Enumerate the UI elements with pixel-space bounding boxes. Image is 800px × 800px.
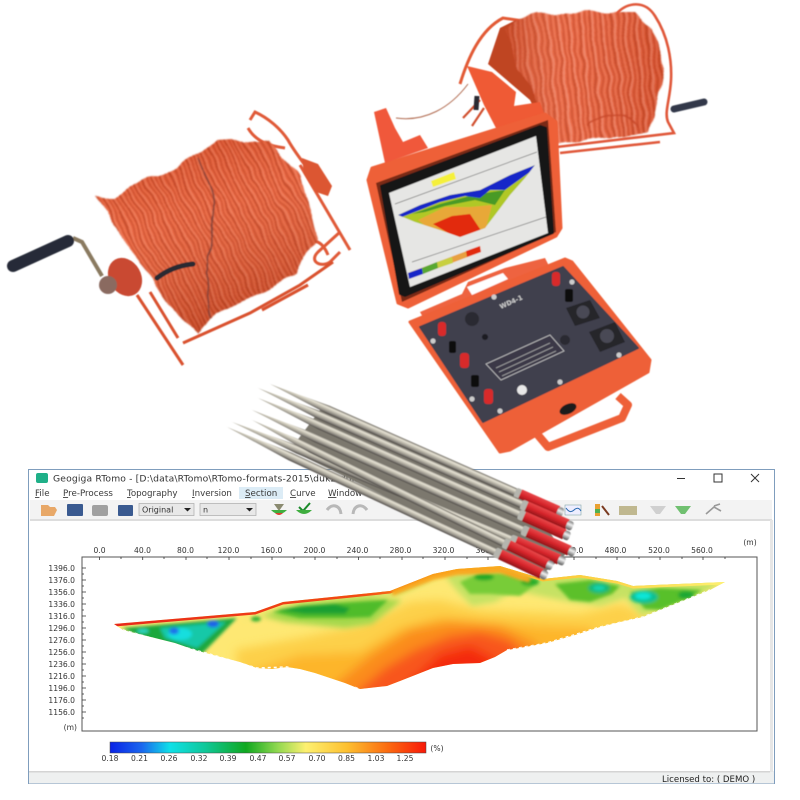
lower frame bars xyxy=(137,262,333,365)
distance labels: 40.0 xyxy=(134,546,151,555)
icon: open folder xyxy=(41,505,57,516)
combo: n xyxy=(200,504,256,516)
dark sense wire xyxy=(198,160,214,318)
tablet screen xyxy=(389,136,548,287)
colour scale: 0.21 xyxy=(131,754,148,763)
logo badge xyxy=(517,385,527,395)
combo: Original: Original xyxy=(142,506,173,514)
electrode stakes bundle xyxy=(225,379,577,581)
data logger device xyxy=(368,108,650,452)
colour scale: 0.57 xyxy=(279,754,296,763)
toolbar xyxy=(30,500,772,521)
crank handle xyxy=(13,241,68,266)
cable reel: front left xyxy=(13,112,350,365)
status bar xyxy=(29,520,774,785)
screen colour bar xyxy=(408,246,481,279)
menu bar: File xyxy=(35,489,50,499)
distance labels: 520.0 xyxy=(648,546,670,555)
icon: tools xyxy=(706,504,721,514)
case lid xyxy=(368,114,561,307)
elevation labels: (m) xyxy=(64,723,77,732)
menu bar: Topography xyxy=(126,489,178,499)
top axis ticks xyxy=(100,557,725,560)
distance labels: 240.0 xyxy=(347,546,369,555)
screen section plot xyxy=(398,164,535,238)
menu bar: Window xyxy=(328,489,362,499)
stake 3 xyxy=(256,393,572,542)
reel crank handle xyxy=(674,102,704,109)
colour scale: 1.25 xyxy=(397,754,414,763)
reel drum with orange wire xyxy=(505,12,664,144)
notice box xyxy=(486,335,564,380)
grey nut xyxy=(99,276,117,294)
distance labels: 120.0 xyxy=(218,546,240,555)
icon: redo xyxy=(353,506,367,514)
elevation labels: 1336.0 xyxy=(48,600,75,609)
icon: section check xyxy=(296,503,312,514)
icon: curve xyxy=(565,505,581,515)
icon: section down xyxy=(271,504,287,515)
stake 4 xyxy=(250,405,577,558)
menu bar: Inversion xyxy=(192,489,232,499)
elevation labels: 1396.0 xyxy=(48,564,75,573)
lid latch left xyxy=(374,108,428,163)
distance labels: 320.0 xyxy=(433,546,455,555)
stake 7 xyxy=(225,422,549,581)
case base xyxy=(410,259,650,452)
screen tag xyxy=(431,172,456,187)
stake 2 xyxy=(256,383,575,532)
resistivity section xyxy=(114,566,725,689)
knobs xyxy=(465,312,479,326)
panel title: WD4-1 xyxy=(498,293,524,311)
colour scale: 0.18 xyxy=(102,754,119,763)
gap between hinges xyxy=(467,273,508,295)
distance labels: (m) xyxy=(743,538,757,547)
distance labels: 0.0 xyxy=(93,546,106,555)
colour scale: 0.39 xyxy=(220,754,237,763)
screen axis lines xyxy=(395,152,546,262)
section plot xyxy=(48,538,757,763)
distance labels: 200.0 xyxy=(304,546,326,555)
cable reel: back right xyxy=(396,4,704,153)
distance labels: 360.0 xyxy=(476,546,498,555)
app icon xyxy=(36,473,48,483)
elevation labels: 1376.0 xyxy=(48,576,75,585)
software window xyxy=(28,470,774,785)
elevation labels: 1196.0 xyxy=(48,684,75,693)
menu bar xyxy=(35,487,362,499)
stake backing shadow xyxy=(290,410,565,572)
distance labels: 560.0 xyxy=(691,546,713,555)
stake 6 xyxy=(250,415,555,571)
colour scale: 0.85 xyxy=(338,754,355,763)
title bar xyxy=(36,473,759,484)
crocodile clip xyxy=(157,264,193,278)
plot frame xyxy=(82,557,757,731)
menu bar: Pre-Process xyxy=(63,489,113,499)
left axis ticks xyxy=(82,568,86,718)
elevation labels: 1276.0 xyxy=(48,636,75,645)
menu bar: Section xyxy=(245,489,277,499)
handle xyxy=(532,396,628,447)
hinges xyxy=(420,258,552,330)
lid gasket xyxy=(376,120,556,302)
menu bar: Curve xyxy=(290,489,316,499)
distance labels: 80.0 xyxy=(177,546,194,555)
reel left flange ring xyxy=(460,18,530,84)
elevation labels xyxy=(48,564,77,732)
combo: n: n xyxy=(203,506,208,514)
elevation labels: 1156.0 xyxy=(48,708,75,717)
crank arm xyxy=(73,238,102,276)
icon: coloured array xyxy=(675,506,691,514)
stake 1 xyxy=(268,379,565,518)
elevation labels: 1316.0 xyxy=(48,612,75,621)
colour scale: 0.47 xyxy=(250,754,267,763)
status bar: Licensed to: ( DEMO ) xyxy=(662,775,755,785)
distance labels xyxy=(93,538,757,555)
control panel xyxy=(420,267,638,422)
elevation labels: 1356.0 xyxy=(48,588,75,597)
thin lead wire xyxy=(396,84,468,119)
reel inner flange xyxy=(488,20,550,142)
elevation labels: 1256.0 xyxy=(48,648,75,657)
colour scale: 0.70 xyxy=(309,754,326,763)
elevation labels: 1176.0 xyxy=(48,696,75,705)
distance labels: 280.0 xyxy=(390,546,412,555)
colour scale: 0.26 xyxy=(161,754,178,763)
left hub xyxy=(101,252,149,302)
elevation labels: 1236.0 xyxy=(48,660,75,669)
icon: save xyxy=(67,504,83,516)
right flange ring xyxy=(248,112,350,264)
icon: undo xyxy=(327,506,341,514)
distance labels: 400.0 xyxy=(519,546,541,555)
right hub xyxy=(302,158,332,196)
tablet bezel xyxy=(381,126,553,296)
colour scale xyxy=(102,742,444,763)
window controls xyxy=(677,474,759,482)
window title: Geogiga RTomo - [D:\data\RTomo\RTomo-formats-2015\duk2\duk2.rto] xyxy=(53,474,383,484)
icon: palette xyxy=(595,504,609,516)
icon: inverted array xyxy=(650,506,666,514)
elevation labels: 1216.0 xyxy=(48,672,75,681)
black terminals xyxy=(449,341,456,353)
distance labels: 440.0 xyxy=(562,546,584,555)
icon: print xyxy=(92,505,108,516)
red terminals xyxy=(438,322,446,336)
lid latch on reel side xyxy=(467,66,545,130)
colour scale: 1.03 xyxy=(368,754,385,763)
connectors xyxy=(566,300,600,326)
elevation labels: 1296.0 xyxy=(48,624,75,633)
colour scale: (%) xyxy=(430,744,444,753)
distance labels: 480.0 xyxy=(605,546,627,555)
colour scale: 0.32 xyxy=(191,754,208,763)
distance labels: 160.0 xyxy=(261,546,283,555)
combo: Original xyxy=(139,504,194,516)
case clasp xyxy=(558,401,578,417)
reel right flange and bars xyxy=(557,4,674,153)
stake 5 xyxy=(230,417,567,567)
icon: save image xyxy=(118,505,133,516)
drum with orange wire xyxy=(95,139,317,333)
icon: electrode grid xyxy=(619,506,637,515)
panel screws xyxy=(491,294,497,300)
